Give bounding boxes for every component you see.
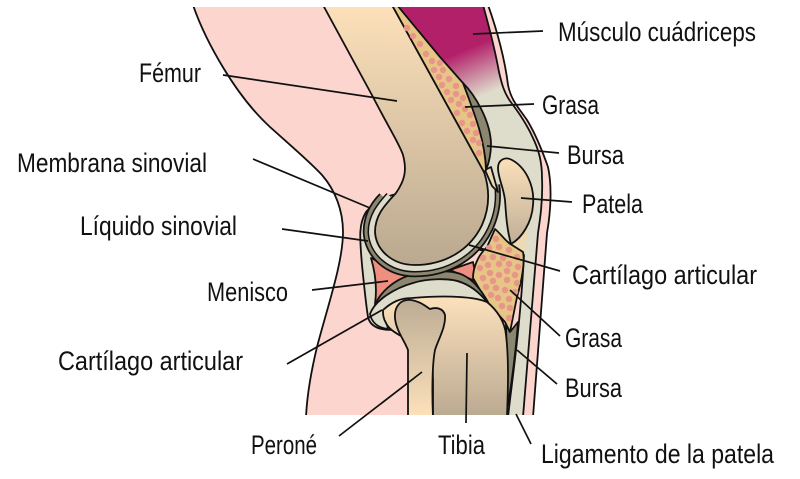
tibia bbox=[383, 297, 508, 417]
label: Grasa upper: Grasa bbox=[542, 90, 600, 120]
patella bbox=[498, 158, 533, 244]
upper fat pad bbox=[392, 5, 486, 172]
joint capsule bbox=[360, 194, 400, 330]
label: Grasa lower: Grasa bbox=[565, 323, 623, 353]
label: Fémur: Fémur bbox=[139, 58, 201, 88]
femoral synovial band bbox=[375, 186, 489, 265]
label: Cartílago articular right: Cartílago articular bbox=[572, 260, 757, 290]
femur bbox=[323, 5, 488, 265]
upper bursa bbox=[463, 83, 491, 170]
label: Patela: Patela bbox=[582, 189, 644, 219]
fibula bbox=[395, 300, 445, 417]
leader lines bbox=[223, 31, 572, 444]
leg soft tissue bbox=[193, 5, 551, 417]
label: Líquido sinovial: Líquido sinovial bbox=[80, 211, 237, 241]
knee illustration bbox=[193, 5, 551, 417]
quadriceps muscle and tissue bbox=[397, 5, 542, 417]
lower bursa bbox=[506, 322, 518, 405]
meniscus left bbox=[370, 257, 404, 304]
tan wedge above cartilage bbox=[485, 167, 498, 192]
tan wedge under patella bbox=[512, 226, 528, 252]
label: Músculo cuádriceps: Músculo cuádriceps bbox=[558, 17, 756, 47]
label: Membrana sinovial: Membrana sinovial bbox=[17, 148, 207, 178]
label: Cartílago articular left: Cartílago articular bbox=[58, 346, 243, 376]
label: Bursa lower: Bursa bbox=[565, 373, 623, 403]
femoral cartilage bbox=[375, 184, 489, 265]
tibial synovial band bbox=[375, 271, 488, 310]
label: Peroné: Peroné bbox=[251, 430, 317, 460]
meniscus right bbox=[450, 262, 477, 282]
tibial cartilage bbox=[370, 279, 490, 329]
label: Menisco: Menisco bbox=[207, 277, 288, 307]
lower fat pad bbox=[473, 229, 524, 332]
label: Bursa upper: Bursa bbox=[567, 140, 625, 170]
label: Tibia: Tibia bbox=[438, 430, 486, 460]
